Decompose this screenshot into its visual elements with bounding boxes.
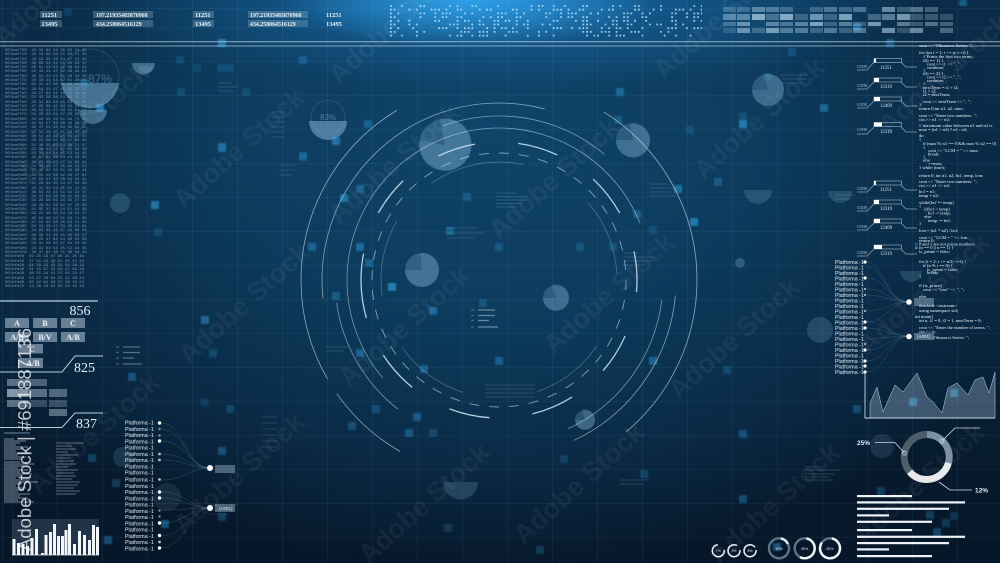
small progress rings: 9%: [731, 549, 737, 553]
platform list: left: Platforma -1: [125, 534, 154, 540]
right code listing: is_prime = false;: [927, 267, 958, 272]
right code listing: {: [923, 145, 925, 150]
callout 837: 837: [76, 417, 97, 432]
watermark: Adobe Stock repeated: Adobe Stock: [538, 226, 681, 360]
right code listing: cout << t1 << ", ";: [927, 62, 961, 68]
top rule lines: [0, 42, 1000, 46]
platform list: left: Platforma -1: [125, 439, 154, 445]
letter buttons: [5, 318, 85, 368]
letter buttons: A/B: [66, 333, 80, 342]
right code listing: break;: [928, 152, 939, 156]
left panel rule 856: [0, 301, 98, 319]
right code listing: if(i == 1) {: [923, 58, 943, 63]
letter buttons: C: [70, 319, 76, 328]
code progress bars: CODE: [857, 65, 868, 69]
right code listing: hcf = n1;: [919, 189, 936, 194]
letter buttons: A/B: [26, 359, 40, 368]
platform list: right: Platforma -1: [835, 310, 864, 316]
right code listing: Fibonacci Series: ";: [933, 335, 969, 340]
platform list: right: Platforma -1: [835, 276, 864, 282]
bar chart: [12, 519, 99, 555]
watermark: Adobe Stock repeated: Adobe Stock: [483, 111, 626, 245]
code progress bars: CODE: [857, 187, 868, 191]
right code listing: return 0;: [919, 238, 935, 243]
gauge: 87%: [61, 49, 119, 124]
top number tags: 13495: [326, 21, 342, 28]
top number tags: 11251: [326, 12, 342, 19]
right code listing: nextTerm = t1 + t2;: [923, 85, 959, 90]
right code listing: while(hcf != temp): [919, 200, 954, 205]
platform list: left: Platforma -1: [125, 452, 154, 458]
right code listing: break;: [927, 270, 938, 275]
platform list: left: Platforma -1: [125, 502, 154, 508]
platform list: left: Platforma -1: [125, 427, 154, 433]
platform list: right: (A001): [917, 334, 931, 339]
right code listing: cout << "Enter the number of terms: ";: [919, 325, 990, 330]
right code listing: cin >> n;: [919, 329, 936, 334]
letter buttons: B/V: [38, 333, 52, 342]
small list: left: [116, 347, 142, 364]
code progress bars: 12319: [880, 207, 893, 212]
right code listing: #include <iostream>: [919, 303, 957, 308]
small progress rings: 82%: [826, 547, 834, 551]
top number tags: 13495: [42, 21, 57, 28]
right code listing: [915, 43, 997, 340]
code progress bars: 12469: [880, 104, 893, 109]
platform list: left: Platforma -1: [125, 521, 154, 527]
half gauge: [132, 63, 155, 74]
watermark: Adobe Stock repeated: Adobe Stock: [663, 271, 806, 405]
right code listing: temp -= hcf;: [928, 218, 951, 223]
code progress bars: 11251: [880, 66, 892, 71]
small progress rings: [712, 537, 842, 560]
thin inner ring: [381, 162, 617, 398]
right code listing: else: [919, 294, 926, 299]
callout 825: 825: [74, 361, 95, 376]
right code listing: cout << "LCM = " << max;: [928, 148, 979, 153]
hex data column: 00leaf700 23 31 64 54 45 52 41 45 00leaf710 25 19 36 23 51 34 71 45 00leaf720 23 19 35 23 64 47 72 45 00leaf730 46 55 24 41 51 64 33 47 00leaf740 28 61 23 52 42 39 64 41 00leaf750 55 42 31 47 52 26 34 54 00leaf760 45 52 23 51 61 23 44 36 00leaf770 25 33 41 54 42 61 26 45 00leaf780 62 31 47 56 21 35 43 52 00leaf790 29 54 33 47 41 25 36 61 00leaf7a0 34 27 64 51 45 32 28 41 00leaf7b0 51 43 26 38 54 61 22 47 00leaf7c0 23 31 64 54 45 52 41 45 00leaf7d0 47 25 39 41 63 34 51 28 00leaf7e0 36 52 41 27 33 45 61 54 00leaf7f0 54 28 33 61 47 26 35 42 00leaf800 25 19 36 23 51 34 71 45 00leaf810 41 62 27 53 38 44 25 36 00leaf820 33 47 51 28 64 35 42 21 00leaf830 62 34 26 45 31 53 47 38 00leaf840 28 51 43 36 25 61 34 47 00leaf850 45 23 58 31 42 27 64 33 00leaf860 31 46 25 62 54 38 21 47 00leaf870 53 36 44 21 47 62 35 28 00leaf880 23 31 64 54 45 52 41 45 00leaf890 42 57 31 26 63 44 28 35 00leaf8a0 36 24 48 53 27 31 62 41 00leaf8b0 51 33 26 47 35 64 42 23 00leaf8c0 27 45 62 34 51 28 36 44 00leaf8d0 44 31 25 56 42 33 47 61 00leaf8e0 35 62 47 23 38 54 26 41 00leaf8f0 61 28 34 45 23 47 52 36 00leaf900 23 31 64 54 45 52 41 45 00leaf910 46 55 24 41 51 64 33 47 00leaf920 32 47 53 28 36 21 64 45 00leaf930 54 26 38 61 43 35 27 42 00leaf940 28 43 51 34 62 47 25 36 00leaf950 41 35 27 63 24 51 44 38 00leaf960 63 22 46 35 54 28 31 47 00leaf970 25 19 36 23 51 34 71 45 00leaf980 37 54 42 26 45 63 21 34 00leaf990 52 31 28 47 33 26 54 61 00leaf9a0 24 63 35 41 57 42 36 28 00leaf9b0 46 38 54 23 31 45 62 27 00leaf9c0 33 25 47 62 44 28 51 36 00leaf9d0 58 41 26 35 47 61 23 34 00leaf9e0 23 31 64 54 45 52 41 45 00leaf9f0 35 47 62 28 21 36 54 43 00lefa00 42 26 33 57 48 31 25 64 00lefa10 27 51 44 36 62 25 47 31 00lefa20 64 38 23 45 31 54 26 42 00lefa30 31 45 57 22 36 47 63 28 00lefa40 46 55 24 41 51 64 33 47 00lefa50 53 27 36 64 25 41 38 44 00lefa60 25 42 61 33 47 28 36 51 00lefa70 44 36 28 51 62 23 45 34: [5, 49, 87, 289]
left panel rule 856: 856: [70, 304, 90, 319]
tag background group: [40, 11, 308, 27]
watermark: Adobe Stock repeated: Adobe Stock: [848, 416, 991, 550]
right code listing: cin >> n1 >> n2;: [919, 183, 950, 188]
platform list: left: Platforma -1: [125, 496, 154, 502]
donut chart: [857, 428, 988, 494]
donut chart: 25%: [857, 440, 870, 447]
top number tags: 11251: [42, 12, 57, 19]
top number tags: 197.21935483870968: [250, 13, 302, 19]
code progress bars: CODE: [857, 128, 868, 132]
right code listing: {: [919, 204, 921, 208]
platform list: left: [125, 420, 235, 552]
right code listing: if(hcf > temp): [924, 206, 950, 212]
central radar rings: [301, 82, 697, 478]
right code listing: }: [919, 221, 921, 226]
watermark: Adobe Stock repeated: Adobe Stock: [168, 406, 311, 540]
small progress rings: 7%: [716, 549, 721, 553]
platform list: right: Platforma -1: [835, 271, 864, 277]
right code listing: for (i = 2; i <= n/2; ++i) {: [919, 259, 966, 264]
top number tags: 434.258064516129: [96, 22, 142, 28]
ring 152: [347, 128, 651, 432]
platform list: right: Platforma -1: [835, 304, 864, 310]
top number tags: 434.258064516129: [250, 22, 296, 28]
right code listing: }: [923, 68, 925, 73]
platform list: right: Platforma -1: [835, 293, 864, 299]
platform list: left: Platforma -1: [125, 458, 154, 464]
platform list: right: Platforma -1: [835, 326, 864, 332]
right code listing: // Prints the first two terms.: [923, 54, 973, 59]
right code listing: cout << "LCM = " << lcm;: [919, 235, 969, 240]
watermark: Adobe Stock repeated: Adobe Stock: [23, 366, 166, 500]
platform list: right: Platforma -1: [835, 337, 864, 343]
top number tags: 197.21935483870968: [96, 13, 148, 19]
top number tags: [40, 11, 342, 28]
watermark: Adobe Stock repeated: Adobe Stock: [13, 56, 156, 190]
platform list: right: [835, 260, 934, 376]
code progress bars: CODE: [857, 251, 868, 255]
right code listing: return 0;int n1, n2, max;: [919, 106, 964, 112]
dashed ring: [372, 153, 626, 407]
right code listing: is_prime = false;: [919, 249, 950, 254]
platform list: right: Platforma -1: [835, 298, 864, 304]
right code listing: int main(): [915, 314, 934, 319]
right code listing: if (max % n1 == 0 && max % n2 == 0): [923, 141, 997, 146]
connector curves: [161, 423, 210, 548]
right code listing: ++max;: [928, 161, 942, 166]
small progress rings: 15%: [775, 547, 783, 551]
right code listing: cout << "Enter two numbers: ";: [919, 113, 977, 118]
code progress bars: 12469: [880, 226, 893, 231]
platform list: right: Platforma -1: [835, 354, 864, 360]
platform list: right: Platforma -1: [835, 342, 864, 348]
platform list: right: Platforma -1: [835, 315, 864, 321]
right code listing: do: [919, 133, 924, 138]
letter buttons: A: [14, 319, 20, 328]
right code listing: t2 = nextTerm;: [923, 92, 950, 97]
letter buttons: B: [42, 319, 48, 328]
right code listing: if (is_prime): [919, 283, 943, 288]
watermark: Adobe Stock repeated: Adobe Stock: [333, 259, 476, 393]
platform list: left: Platforma -1: [125, 446, 154, 452]
right code listing: temp = n2;: [919, 193, 939, 198]
code progress bars: CODE: [857, 103, 868, 107]
right code listing: cout << "true" << ", ";: [923, 287, 964, 293]
watermark: vertical Adobe Stock id: Adobe Stock | #691887136: [14, 328, 35, 551]
right code listing: }: [923, 81, 925, 86]
right code listing: t1 = t2;: [923, 88, 936, 94]
platform list: left: Platforma -1: [125, 509, 154, 515]
right code listing: }: [923, 154, 925, 160]
platform list: left: Platforma -1: [125, 515, 154, 521]
watermark: Adobe Stock repeated: Adobe Stock: [323, 96, 466, 230]
code progress bars: CODE: [857, 84, 868, 88]
right code listing: if (n % i == 0) {: [923, 263, 953, 268]
right code listing: else: [923, 158, 930, 162]
callout 837: [0, 413, 103, 432]
pie blobs: [110, 74, 894, 511]
small list: center: [471, 310, 498, 327]
platform list: right: Platforma -1: [835, 364, 864, 370]
small code columns: [4, 433, 84, 502]
right code listing: else: [924, 214, 931, 219]
platform list: left: Platforma -1: [125, 540, 154, 546]
platform list: left: Platforma -1: [125, 484, 154, 490]
gauge: 83%: [309, 100, 347, 140]
platform list: right: Platforma -1: [835, 260, 864, 266]
right code listing: continue;: [927, 65, 944, 70]
top number tags: 13495: [195, 21, 211, 28]
platform list: right: Platforma -1: [835, 320, 864, 326]
right code listing: cout << t2 << ", ";: [927, 74, 961, 80]
platform list: left: Platforma -1: [125, 546, 154, 552]
horizontal bar list: [857, 495, 965, 557]
platform list: right: Platforma -1: [835, 370, 864, 376]
right code listing: }: [919, 102, 921, 107]
platform list: right: Platforma -1: [835, 266, 864, 272]
code progress bars: 12319: [880, 130, 893, 135]
platform list: left: Platforma -1: [125, 470, 154, 476]
right code listing: cout << nextTerm << ", ";: [923, 99, 971, 105]
top dot matrix: [390, 6, 702, 36]
right code listing: if(i == 2) {: [923, 71, 943, 76]
letter buttons: C: [29, 345, 35, 354]
platform list: left: Platforma -1: [125, 433, 154, 439]
callout 825: [0, 356, 103, 376]
platform list: left: Platforma -1: [125, 420, 154, 426]
platform list: left: Platforma -1: [125, 528, 154, 534]
platform list: right: Platforma -1: [835, 359, 864, 365]
small progress rings: 8%: [747, 549, 753, 553]
code progress bars: CODE: [857, 225, 868, 229]
watermark: Adobe Stock repeated: Adobe Stock: [168, 81, 311, 215]
watermark: Adobe Stock repeated: Adobe Stock: [688, 51, 831, 185]
platform list: right: Platforma -1: [835, 332, 864, 338]
gauge: 87%: 87%: [88, 72, 112, 86]
code progress bars: 11251: [880, 188, 892, 193]
platform list: left: Platforma -1: [125, 478, 154, 484]
half gauge cups: [139, 66, 922, 500]
right code listing: max = (n1 > n2) ? n1 : n2;: [919, 127, 967, 132]
platform list: left: Platforma -1: [125, 490, 154, 496]
right code listing: // 0 and 1 are not prime numbers: [915, 242, 975, 246]
outer ring: [301, 82, 697, 478]
heat blocks: [7, 379, 67, 416]
right code listing: if (n == 0 || n == 1) {: [915, 245, 954, 250]
gauge: 83%: 83%: [320, 113, 336, 122]
ring 177: [322, 103, 676, 457]
right code listing: lcm = (n1 * n2) / hcf;: [919, 228, 958, 233]
code progress bars: 12319: [880, 85, 893, 90]
platform list: right: Platforma -1: [835, 348, 864, 354]
right code listing: int n, t1 = 0, t2 = 1, nextTerm = 0;: [919, 318, 982, 324]
connector curves: [867, 262, 909, 372]
watermark: Adobe Stock repeated: Adobe Stock: [173, 236, 316, 370]
right code listing: using namespace std;: [919, 308, 958, 313]
pie: center top: [419, 118, 472, 171]
watermark: Adobe Stock repeated: Adobe Stock: [508, 416, 651, 550]
top number tags: 11251: [195, 12, 211, 19]
right code listing: } while (true);: [919, 165, 945, 170]
right code listing: return 0; int n1, n2, hcf, temp, lcm;: [919, 173, 983, 179]
pie and gauge blobs: [61, 49, 922, 511]
right code listing: continue;: [927, 78, 944, 83]
ring 164: [335, 116, 663, 444]
top right tile grid: [723, 7, 953, 33]
right code listing: for (int i = 1; i <= n; ++i) {: [919, 50, 969, 55]
right code listing: {: [919, 137, 921, 142]
right code listing: cout << "Enter two numbers: ";: [919, 179, 977, 184]
platform list: right: Platforma -1: [835, 282, 864, 288]
letter buttons: A/B: [10, 333, 24, 342]
right code listing: }: [919, 274, 921, 279]
right code listing: // maximum value between n1 and n2 is: [919, 123, 993, 128]
right code listing: cin >> n1 >> n2;: [919, 117, 950, 122]
platform list: left: Platforma -1: [125, 464, 154, 470]
area chart: [865, 372, 995, 418]
code progress bars: CODE: [857, 206, 868, 210]
donut chart: 12%: [975, 488, 988, 494]
faint text-line blocks: [210, 75, 855, 514]
bold segment ring: [361, 142, 637, 418]
platform list: left: (A001): [219, 506, 233, 511]
small progress rings: 55%: [801, 547, 808, 551]
right code listing: hcf -= temp;: [928, 210, 951, 216]
code progress bars: [857, 58, 917, 257]
code progress bars: 12319: [880, 252, 893, 257]
watermark: Adobe Stock repeated: Adobe Stock: [853, 226, 996, 360]
right code listing: cout << "Fibonacci Series: ";: [919, 43, 972, 48]
platform list: right: Platforma -1: [835, 288, 864, 294]
